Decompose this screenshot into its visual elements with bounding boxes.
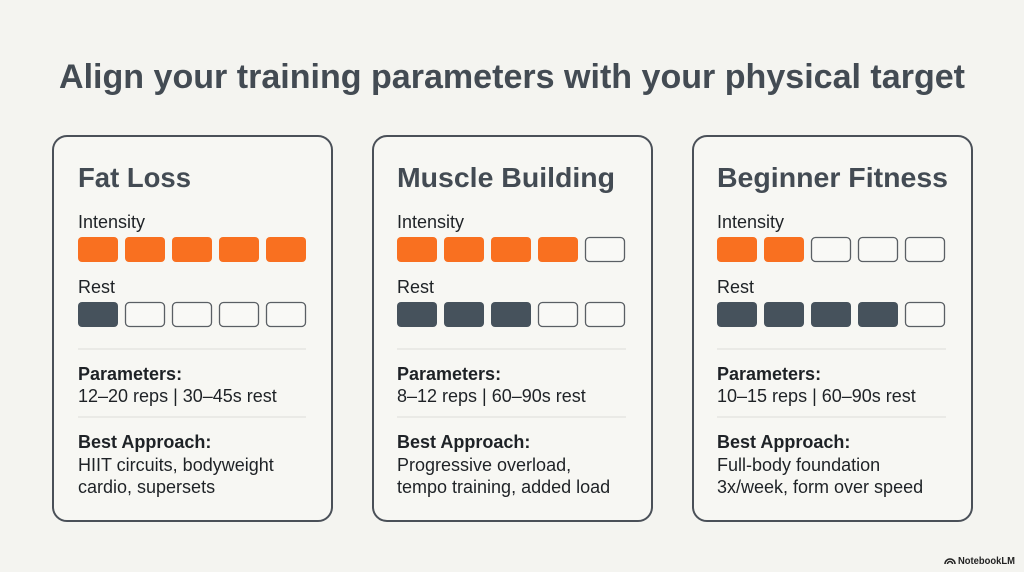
logo: NotebookLM: NotebookLM [958,556,1015,567]
best approach text [78,432,274,497]
panel: muscle building [373,136,652,521]
best approach text: Best Approach: [397,432,530,452]
parameters text [78,364,277,406]
best approach text: Progressive overload, [397,455,571,475]
intensity meter [78,237,306,262]
panel: fat loss [53,136,332,521]
parameters text [397,364,586,406]
parameters text: 12–20 reps | 30–45s rest [78,386,277,406]
best approach text [717,432,923,497]
best approach text: HIIT circuits, bodyweight [78,455,274,475]
rest meter [717,302,944,327]
heading: muscle building: Muscle Building [397,162,615,193]
panel: beginner fitness [693,136,972,521]
intensity label: Intensity [78,212,145,232]
title: Align your training parameters with your physical target [59,58,965,96]
intensity meter [397,237,624,262]
intensity label: Intensity [717,212,784,232]
rest meter [397,302,624,327]
parameters text: Parameters: [397,364,501,384]
best approach text: Best Approach: [78,432,211,452]
parameters text: Parameters: [78,364,182,384]
rest label: Rest [78,277,115,297]
rest meter [78,302,306,327]
best approach text: tempo training, added load [397,477,610,497]
rest label: Rest [397,277,434,297]
parameters text: Parameters: [717,364,821,384]
best approach text: 3x/week, form over speed [717,477,923,497]
heading: fat loss: Fat Loss [78,162,191,193]
intensity label: Intensity [397,212,464,232]
best approach text: Best Approach: [717,432,850,452]
parameters text: 8–12 reps | 60–90s rest [397,386,586,406]
best approach text: cardio, supersets [78,477,215,497]
rest label: Rest [717,277,754,297]
best approach text [397,432,610,497]
best approach text: Full-body foundation [717,455,880,475]
parameters text: 10–15 reps | 60–90s rest [717,386,916,406]
heading: beginner fitness: Beginner Fitness [717,162,948,193]
intensity meter [717,237,944,262]
parameters text [717,364,916,406]
